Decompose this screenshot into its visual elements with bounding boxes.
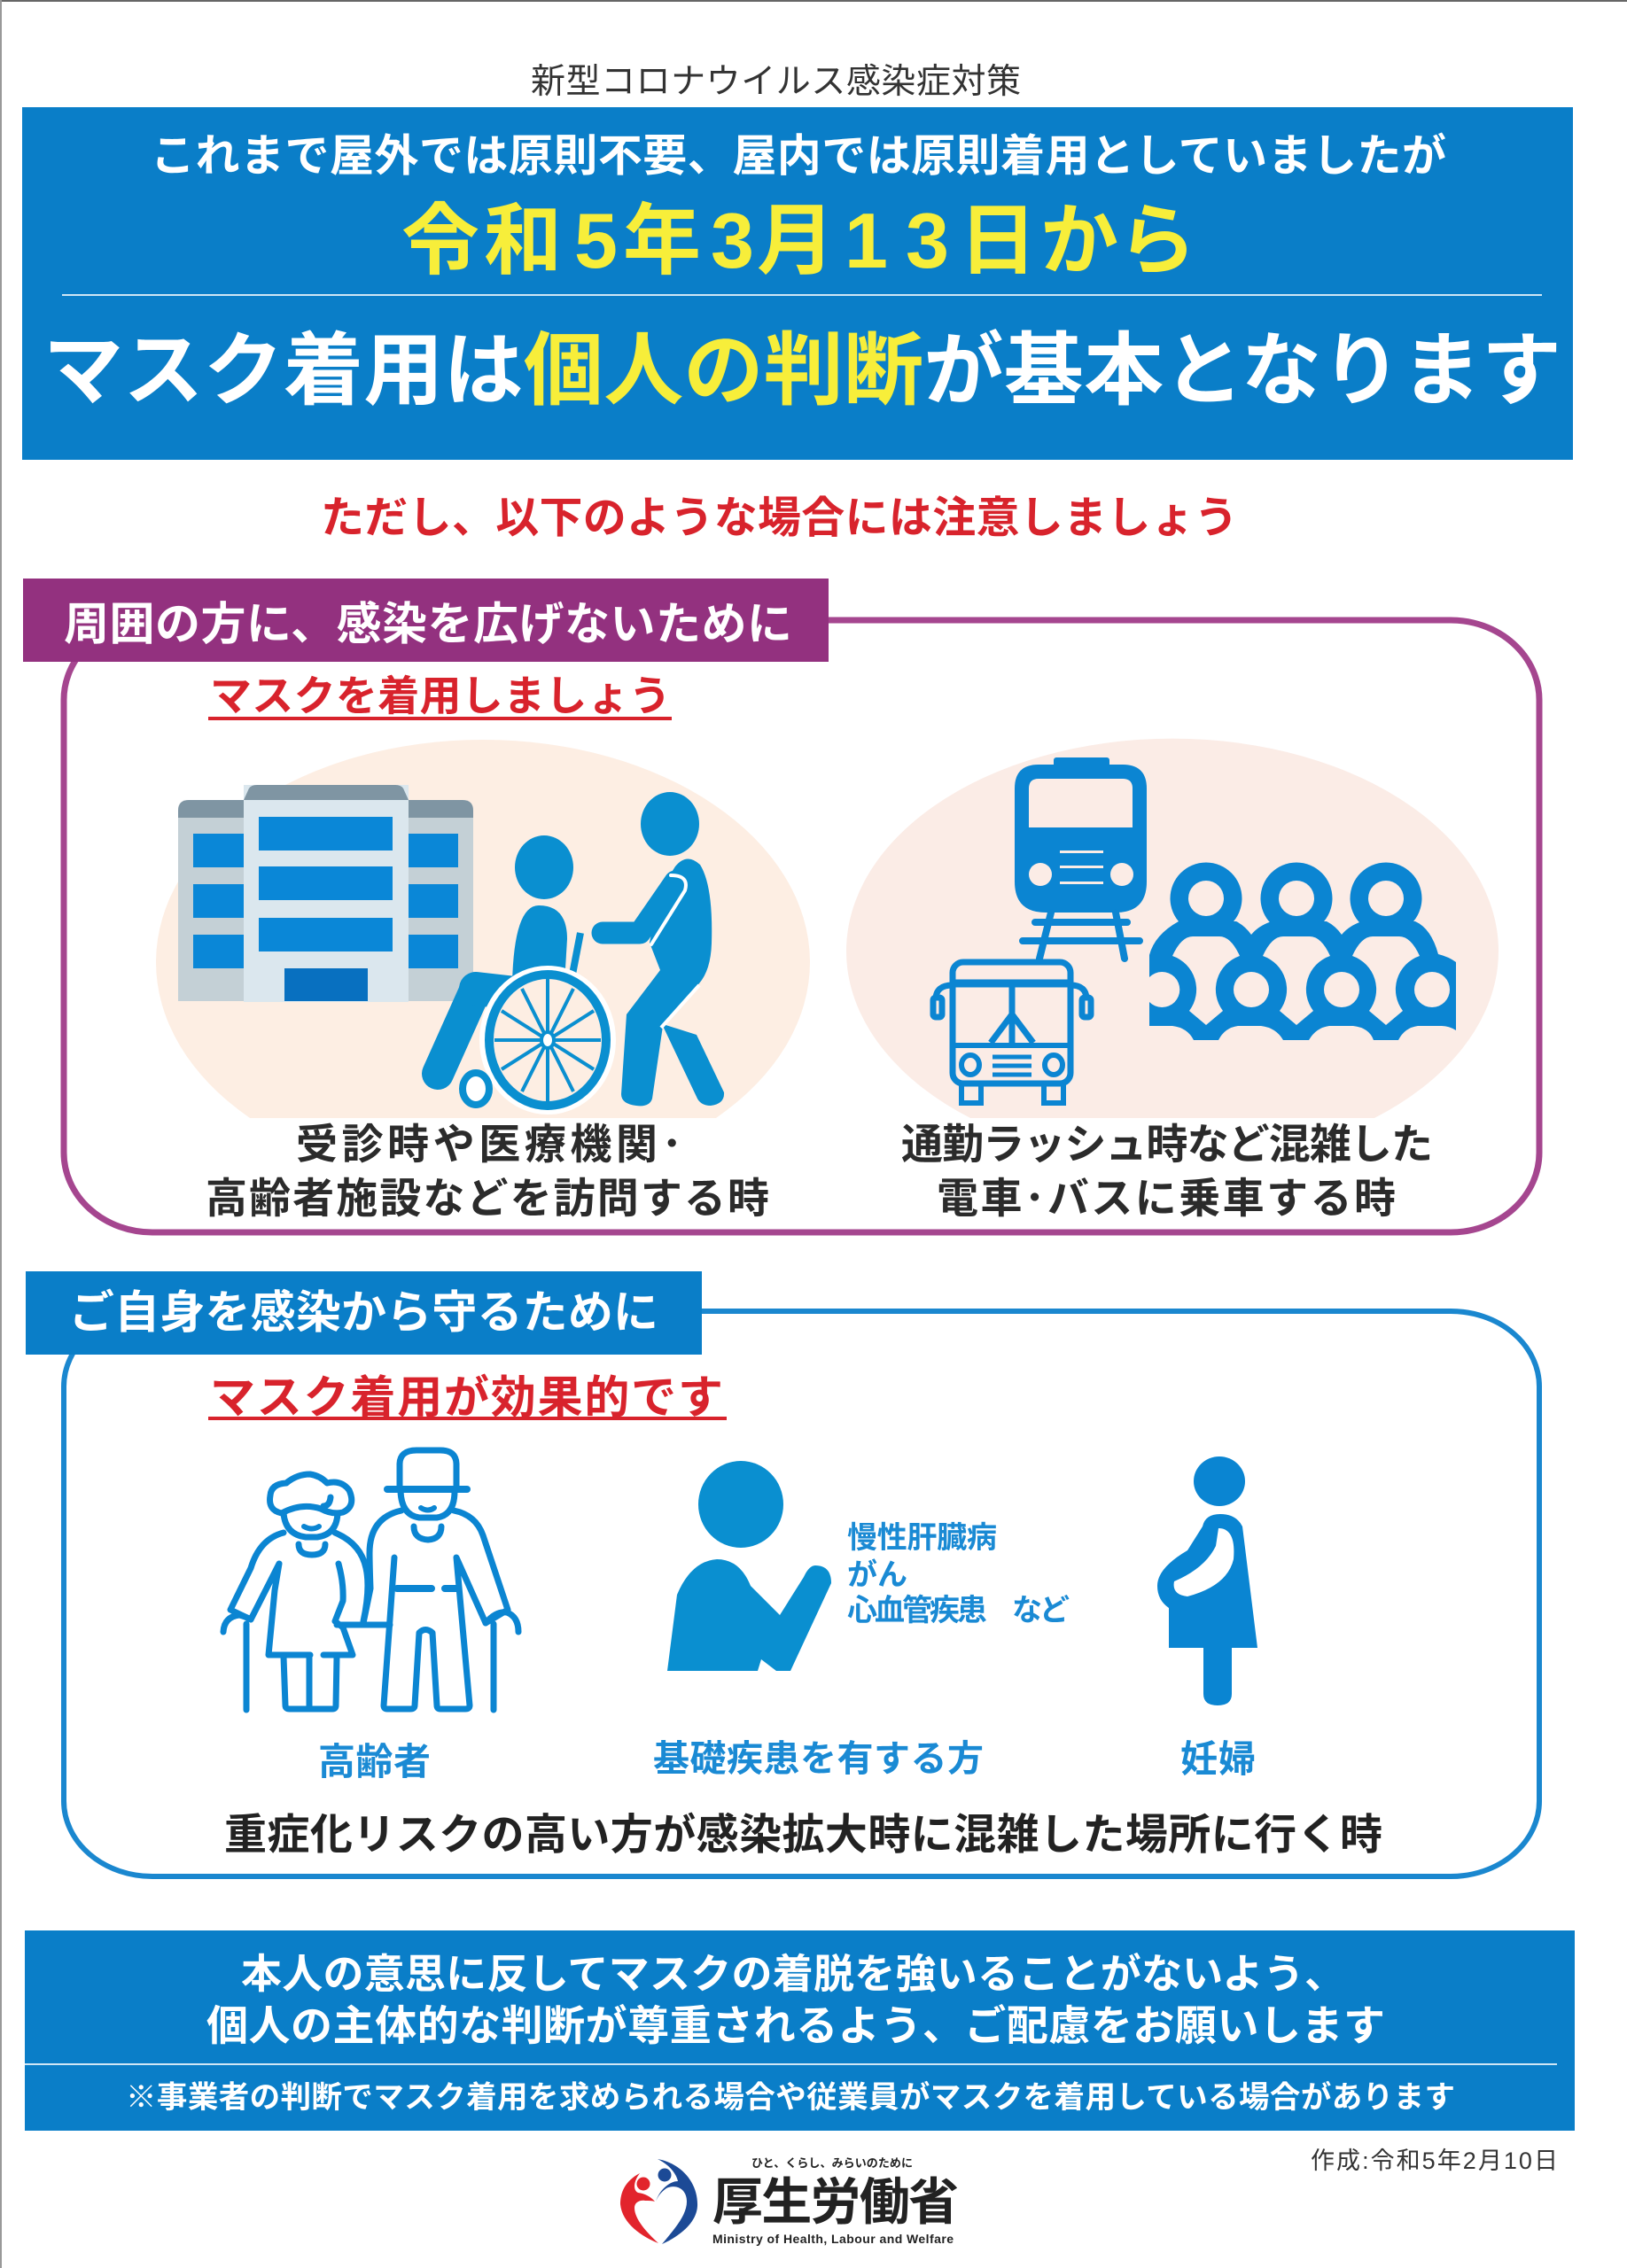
caption right [901,1121,1433,1222]
panel: protect yourself [26,1271,1539,1876]
red subheading: マスク着用が効果的です [210,1372,723,1423]
icon: crowd [1149,863,1456,1040]
banner date: 令和5年3月13日から [401,197,1196,284]
logo tagline: ひと、くらし、みらいのために [751,2156,913,2170]
icon: person with illness [667,1461,831,1671]
label: pregnant: 妊婦 [1180,1738,1256,1780]
banner request: 個人の主体的な判断が尊重されるよう、ご配慮をお願いします [206,2002,1385,2049]
panel: prevent spreading infection [23,579,1539,1232]
caution heading: ただし、以下のような場合には注意しましょう [321,494,1238,542]
panel heading [26,1271,702,1355]
panel heading [23,579,829,662]
icon: pregnant woman [1157,1456,1257,1705]
banner request [206,1951,1385,2049]
caption right: 通勤ラッシュ時など混雑した [901,1121,1433,1168]
logo: Ministry of Health, Labour and Welfare [620,2156,959,2246]
small heading: 新型コロナウイルス感染症対策 [531,63,1021,101]
underlying illnesses list: 心血管疾患 など [847,1594,1070,1627]
red subheading: マスクを着用しましょう [210,672,671,719]
logo mark [620,2159,697,2244]
panel heading: 周囲の方に、感染を広げないために [64,599,792,649]
top banner [22,107,1573,460]
logo English name: Ministry of Health, Labour and Welfare [712,2232,954,2246]
peach ellipse left [156,740,810,1118]
caption right: 電車･バスに乗車する時 [937,1175,1396,1222]
caption left [206,1121,769,1222]
icon: bus [933,962,1091,1103]
banner note: ※事業者の判断でマスク着用を求められる場合や従業員がマスクを着用している場合があります [126,2080,1455,2115]
banner line 1: これまで屋外では原則不要、屋内では原則着用としていましたが [151,131,1446,181]
underlying illnesses list [847,1521,1070,1627]
icon: wheelchair and carer [438,792,724,1107]
icon: elderly couple [223,1450,518,1710]
icon: train [1015,757,1147,959]
underlying illnesses list: 慢性肝臓病 [847,1521,997,1555]
underlying illnesses list: がん [847,1557,907,1592]
caption left: 高齢者施設などを訪問する時 [206,1175,769,1222]
logo name: 厚生労働省 [712,2174,959,2231]
banner request: 本人の意思に反してマスクの着脱を強いることがないよう、 [241,1951,1345,1997]
icon: hospital building [178,785,473,1002]
caption left: 受診時や医療機関･ [296,1121,682,1168]
banner main message: マスク着用は個人の判断が基本となります [43,327,1561,416]
creation date: 作成:令和5年2月10日 [1311,2148,1558,2174]
bottom banner [25,1930,1575,2131]
label: elderly: 高齢者 [318,1741,431,1783]
label: underlying conditions: 基礎疾患を有する方 [653,1738,984,1779]
caption: high risk: 重症化リスクの高い方が感染拡大時に混雑した場所に行く時 [224,1812,1382,1859]
panel heading: ご自身を感染から守るために [69,1287,658,1338]
peach ellipse right [846,739,1499,1118]
